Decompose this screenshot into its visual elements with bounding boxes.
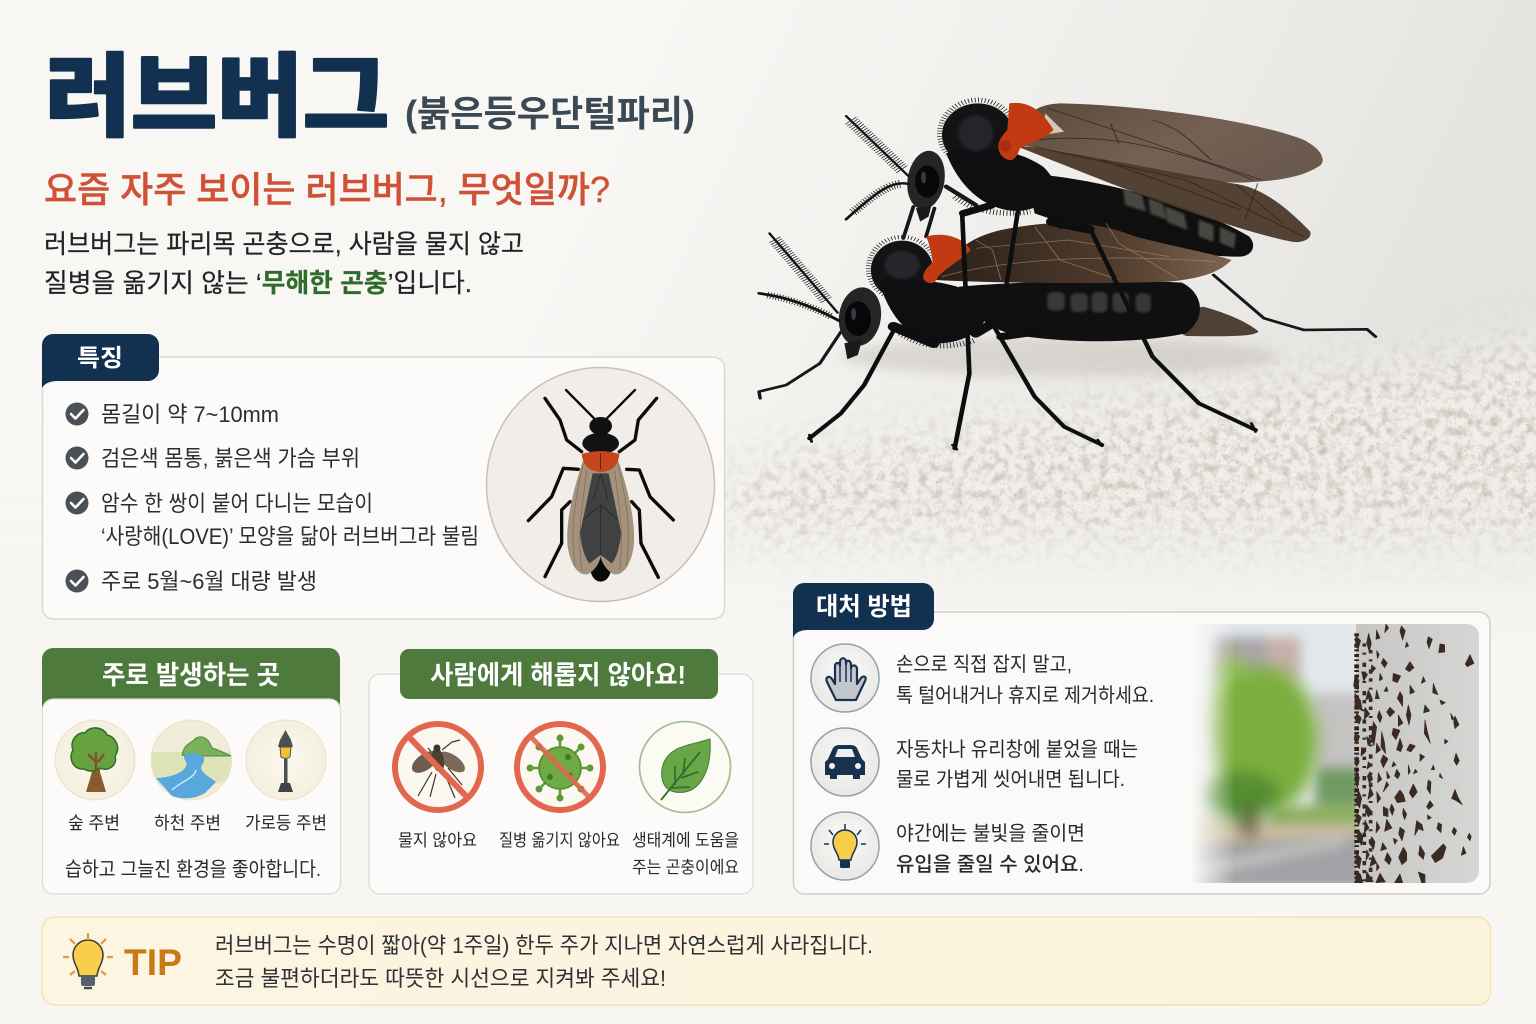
habitat heading: 주로 발생하는 곳 [102,660,280,690]
respond tab [793,583,934,638]
tip background [42,917,1490,1005]
panel: where they appear [42,648,340,894]
harmless card [369,674,753,894]
panel: harmless to people [369,649,753,894]
harmless labels: 주는 곤충이에요 [632,858,739,877]
features heading: 특징 [77,345,123,372]
icon: leaf ecosystem [640,722,730,812]
icon: mosquito no bite [394,723,482,811]
lower fly rear wing [1152,307,1259,336]
tip text [215,933,873,991]
title: 러브버그 [45,48,389,148]
check list: 암수 한 쌍이 붙어 다니는 모습이 [101,491,373,516]
habitat labels: 가로등 주변 [245,813,327,833]
respond heading: 대처 방법 [816,593,912,621]
check list: 주로 5월~6월 대량 발생 [101,569,317,594]
near legs [809,205,1256,449]
respond advice text: 톡 털어내거나 휴지로 제거하세요. [896,684,1154,707]
icon: tip bulb [63,933,113,988]
upper fly red patch [998,103,1054,160]
harmless labels: 생태계에 도움을 [632,831,739,850]
respond advice text [896,653,1154,876]
check list: ‘사랑해(LOVE)’ 모양을 닮아 러브버그라 불림 [101,524,479,549]
check list [66,402,479,594]
habitat labels [68,813,327,833]
features card [42,357,724,619]
harmless header [400,649,718,699]
tip banner [42,917,1490,1005]
page background [725,0,1536,589]
intro text: 질병을 옮기지 않는 ‘무해한 곤충’입니다. [44,268,472,298]
habitat labels: 하천 주변 [154,813,221,833]
upper fly thorax and hair [942,103,1014,167]
check list: 몸길이 약 7~10mm [101,402,279,427]
TIP label: TIP [124,942,182,983]
lower fly thorax [871,241,933,299]
photo: lovebugs on a wall [1185,624,1480,890]
lower fly wing [936,223,1232,283]
harmless heading: 사람에게 해롭지 않아요! [430,660,686,690]
icon: street lamp [246,720,326,800]
habitat labels: 숲 주변 [68,813,120,833]
check list: 검은색 몸통, 붉은색 가슴 부위 [101,446,360,471]
icon: car [811,728,879,796]
tip text: 러브버그는 수명이 짧아(약 1주일) 한두 주가 지나면 자연스럽게 사라집니다. [215,933,873,958]
hero photo: mating lovebug pair [759,100,1376,449]
features tab [42,334,159,388]
top-view lovebug photo [486,368,714,602]
habitat header [42,648,340,710]
upper fly [759,100,1323,449]
far legs [759,187,1376,398]
respond advice text: 자동차나 유리창에 붙었을 때는 [896,738,1138,761]
harmless labels: 물지 않아요 [398,831,477,850]
lower fly red patch [923,235,971,283]
panel: how to respond [793,583,1490,894]
icon: virus no disease [516,723,604,811]
respond advice text: 야간에는 불빛을 줄이면 [896,822,1085,845]
lower fly head [836,286,884,347]
upper fly antennae [846,116,908,219]
habitat note: 습하고 그늘진 환경을 좋아합니다. [65,858,321,881]
upper fly abdomen [1026,173,1253,257]
icon: gloved hand [811,644,879,712]
harmless labels [398,831,739,877]
upper fly wings [1014,103,1323,183]
lower fly abdomen [959,281,1200,341]
icon: tree [55,720,135,800]
respond advice text: 유입을 줄일 수 있어요. [896,853,1084,876]
intro text: 러브버그는 파리목 곤충으로, 사람을 물지 않고 [44,229,524,259]
respond advice text: 손으로 직접 잡지 말고, [896,653,1072,676]
intro text [44,229,524,298]
tip text: 조금 불편하더라도 따뜻한 시선으로 지켜봐 주세요! [215,966,666,991]
subheading: 요즘 자주 보이는 러브버그, 무엇일까? [44,169,610,210]
harmless labels: 질병 옮기지 않아요 [499,831,620,850]
icon: river [151,720,232,800]
contact shadow [841,337,1279,377]
habitat card [42,699,340,894]
lower fly antennae [759,233,839,321]
upper fly head [904,149,948,211]
scientific name: (붉은등우단털파리) [405,93,695,134]
respond card [794,612,1490,894]
respond advice text: 물로 가볍게 씻어내면 됩니다. [896,768,1125,791]
icon: light bulb [811,812,879,880]
panel: features [42,334,724,619]
